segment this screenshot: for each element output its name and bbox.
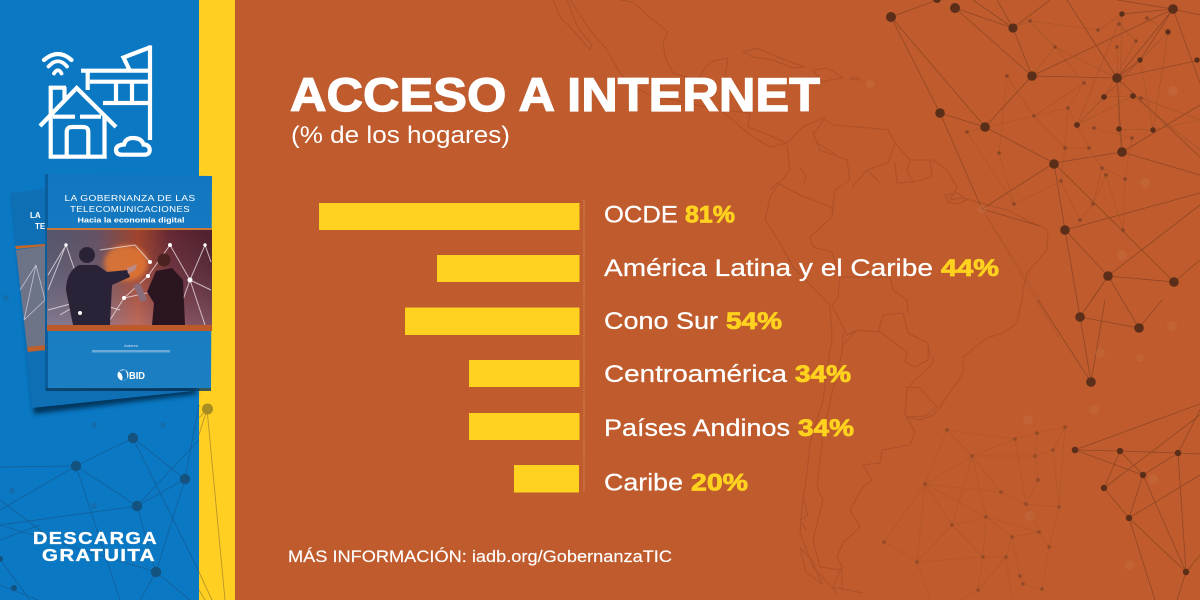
- book: title: [64, 193, 196, 224]
- axis line: [583, 200, 585, 492]
- label: Países Andinos: 34%: [798, 415, 854, 442]
- labels: [604, 202, 999, 496]
- label: Caribe: Caribe: [604, 470, 683, 496]
- label: América Latina y el Caribe: 44%: [941, 255, 999, 282]
- book: back copy: [10, 189, 198, 414]
- book: BID logo: [118, 370, 145, 382]
- label: Caribe: [604, 470, 748, 496]
- book: title: LA GOBERNANZA DE LAS: [64, 193, 196, 203]
- icon: house, building, wifi and cloud: [40, 46, 151, 159]
- label: Caribe: 20%: [691, 470, 748, 496]
- label: OCDE: OCDE: [604, 202, 678, 228]
- book: cover photo: [47, 230, 212, 325]
- icon: building: [81, 46, 151, 140]
- call to action: descarga gratuita: GRATUITA: [42, 545, 156, 565]
- bar chart: [319, 200, 584, 492]
- bar: Países Andinos: [469, 413, 580, 440]
- book: authors: [92, 343, 170, 352]
- network: bottom left over blue and yellow: [0, 295, 225, 600]
- book: front cover: [45, 174, 212, 391]
- call to action: descarga gratuita: DESCARGA: [33, 528, 158, 548]
- book: title: Hacia la economía digital: [78, 216, 184, 224]
- call to action: descarga gratuita: [33, 528, 158, 565]
- label: Centroamérica: Centroamérica: [604, 361, 787, 388]
- left panel: blue: [0, 0, 199, 600]
- yellow stripe node: [202, 404, 213, 414]
- bar: América Latina y el Caribe: [437, 255, 580, 282]
- map of Latin America: [553, 0, 1048, 593]
- label: América Latina y el Caribe: América Latina y el Caribe: [604, 255, 933, 282]
- bar: Cono Sur: [405, 308, 580, 335]
- book: back copy title fragment: LA: [30, 211, 41, 220]
- book: authors: Autores: [124, 343, 138, 348]
- network: lower right: [1072, 404, 1200, 600]
- network: upper right: [866, 0, 1200, 387]
- book: silhouettes: [66, 247, 185, 325]
- icon: cloud: [116, 138, 150, 155]
- book: back copy title fragment: [30, 211, 46, 231]
- book: BID logo: BID: [129, 370, 145, 382]
- label: Cono Sur: 54%: [726, 308, 782, 335]
- label: OCDE: [604, 202, 735, 228]
- label: Países Andinos: [604, 415, 854, 442]
- icon: house: [40, 86, 116, 159]
- book: orange band: [47, 325, 212, 331]
- subtitle: (% de los hogares): [291, 122, 510, 149]
- label: Centroamérica: [604, 361, 851, 388]
- label: OCDE: 81%: [685, 202, 735, 228]
- bar: OCDE: [319, 203, 580, 230]
- bar: Caribe: [514, 465, 579, 492]
- label: Cono Sur: Cono Sur: [604, 308, 718, 335]
- book: back copy title fragment: TE: [35, 222, 46, 231]
- label: Cono Sur: [604, 308, 782, 335]
- bar: Centroamérica: [469, 360, 580, 387]
- title: ACCESO A INTERNET: [290, 69, 820, 122]
- footer: more information: MÁS INFORMACIÓN: iadb.org/GobernanzaTIC: [288, 547, 672, 566]
- network: faint lower center: [882, 321, 1177, 600]
- label: Centroamérica: 34%: [795, 361, 851, 388]
- icon: wifi: [44, 54, 72, 74]
- yellow stripe: [199, 0, 235, 600]
- label: Países Andinos: Países Andinos: [604, 415, 790, 442]
- book: title: TELECOMUNICACIONES: [70, 204, 190, 214]
